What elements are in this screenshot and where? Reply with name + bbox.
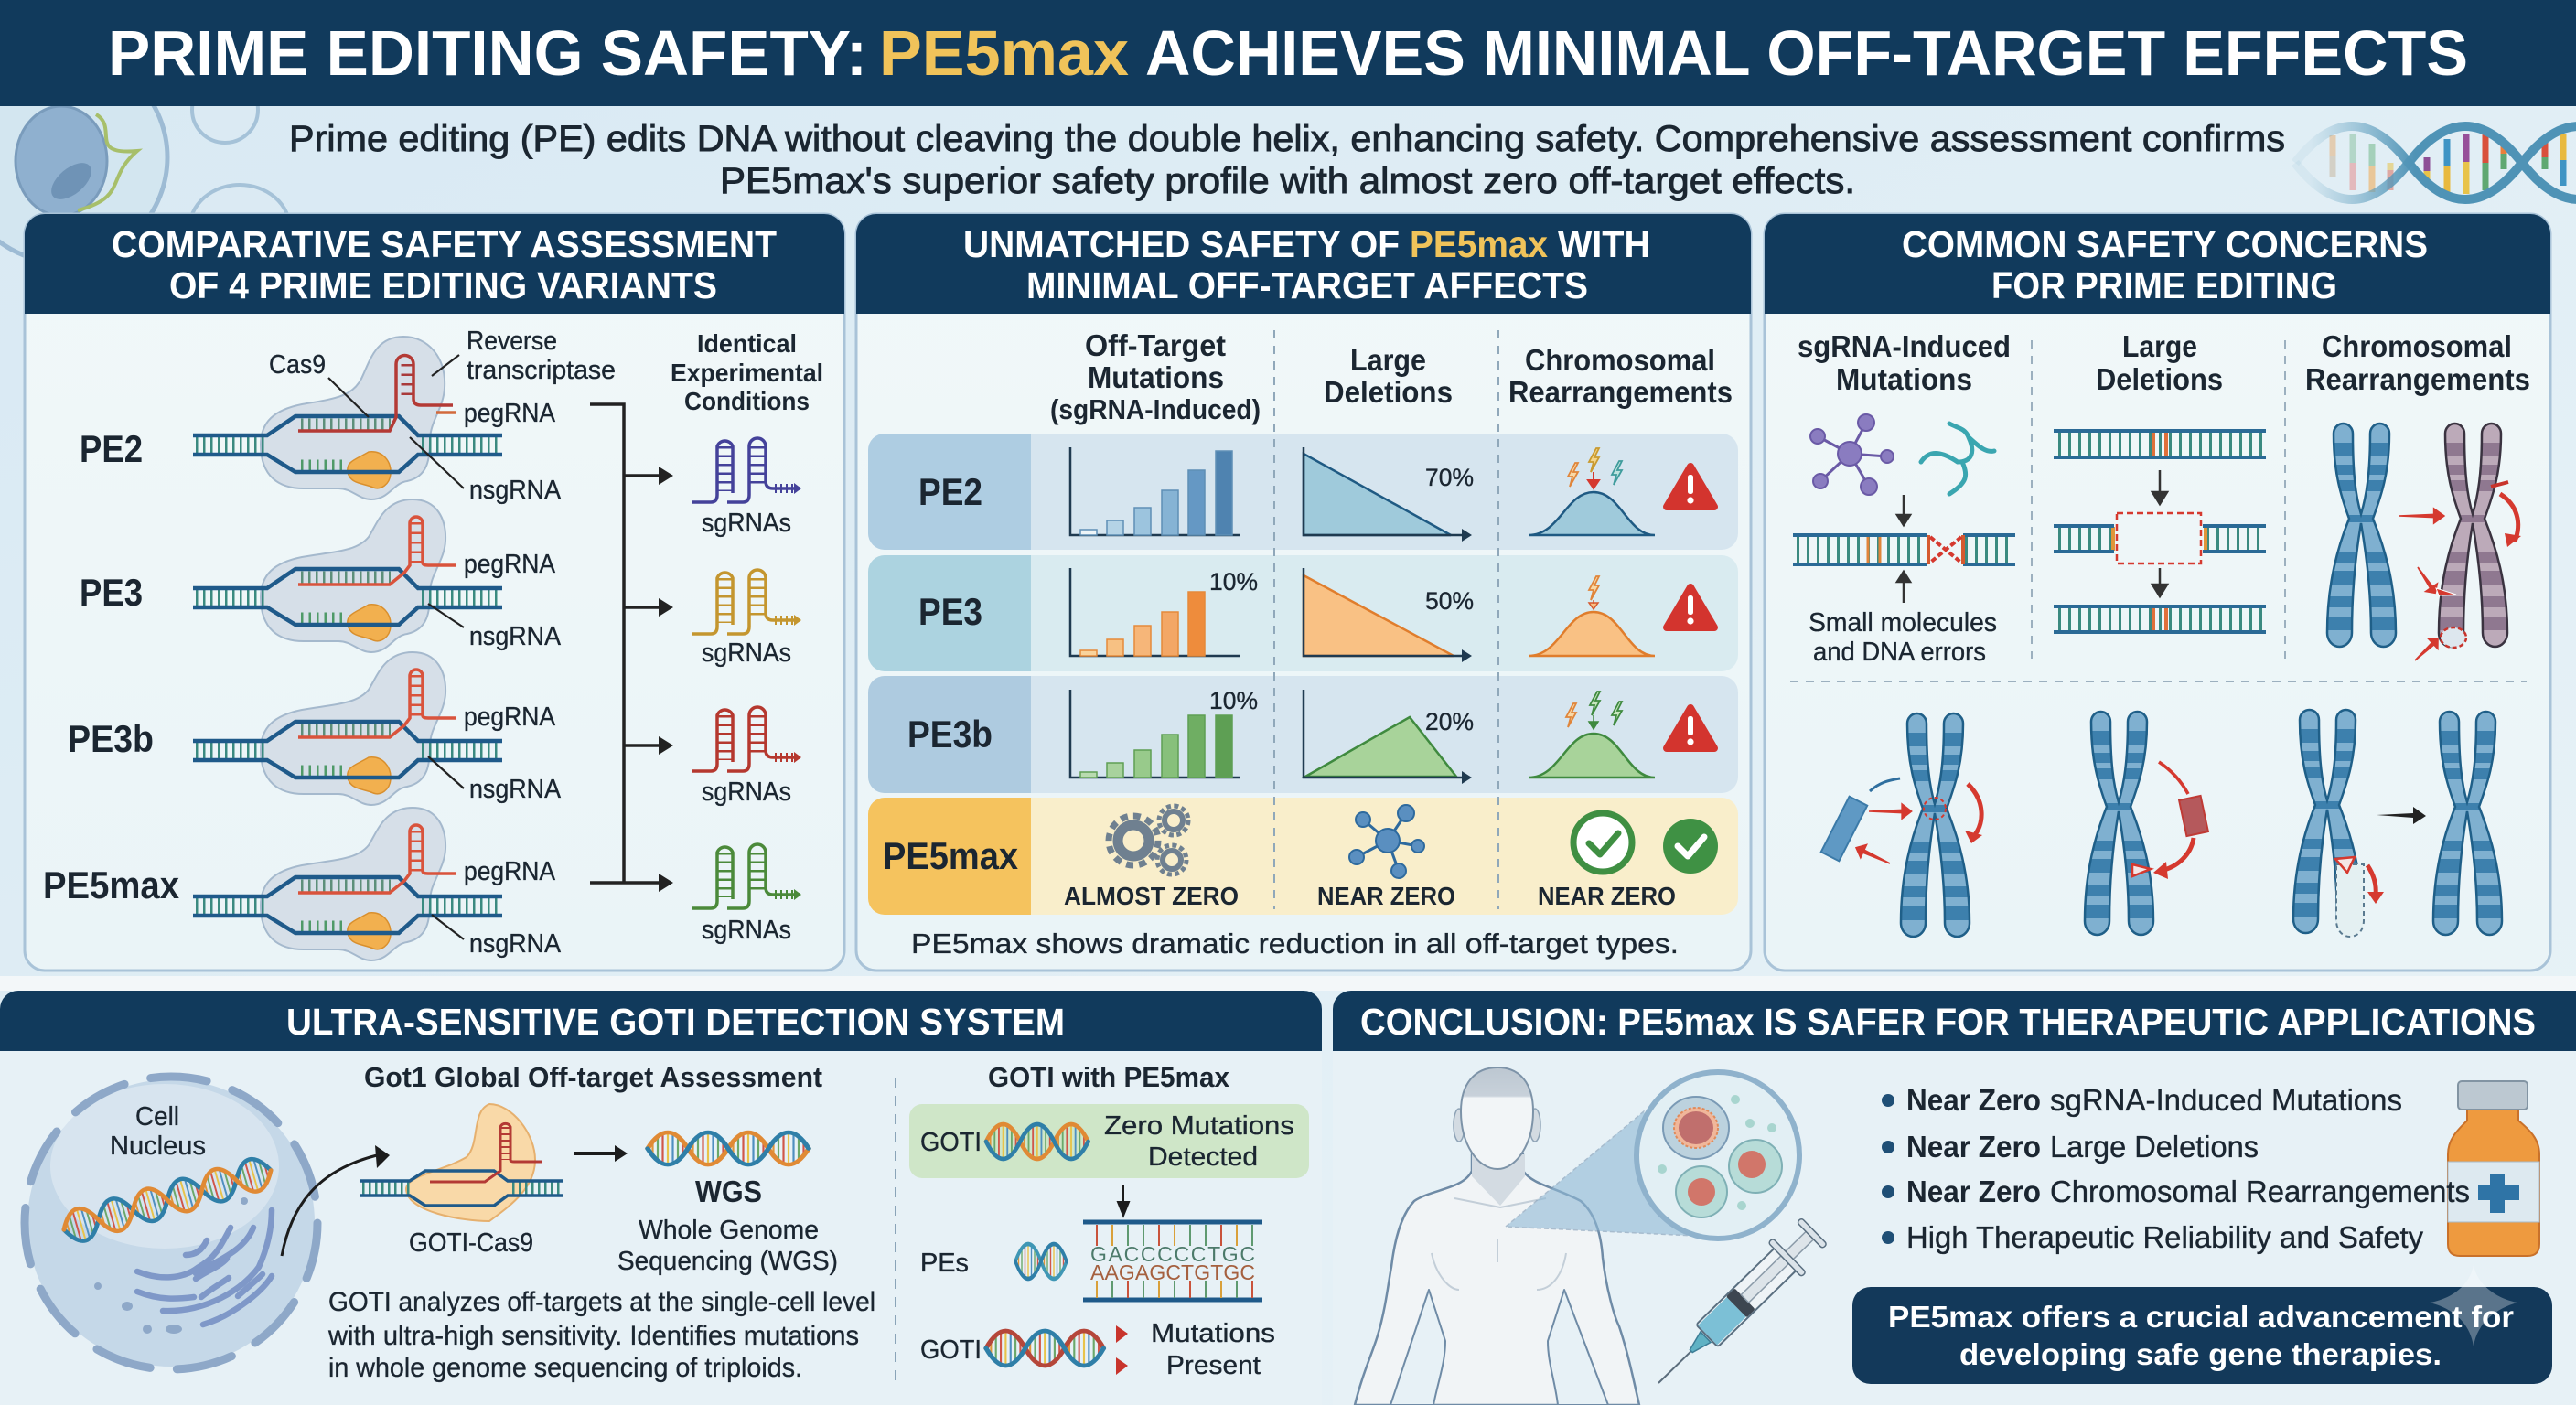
sequencing readout: GACCCCCTGC [1090,1242,1255,1266]
diagram labels: pegRNA [464,702,556,732]
sgRNA labels: sgRNAs [702,778,791,807]
deletion chart: PE3: 50% [1425,587,1474,615]
caption: PE5max shows dramatic reduction in all off-target types. [911,928,1679,960]
heading: WITH [1558,223,1650,265]
icon: green checks [1573,813,1718,874]
icon: gears [1109,806,1188,874]
sequencing readout [1083,1222,1262,1300]
row: PE3 [868,555,1738,671]
diagram labels: pegRNA [464,399,556,428]
result: mutations present: Present [1166,1351,1261,1380]
row: PE3: PE3 [918,590,982,633]
panel: GOTI detection system [0,991,1322,1405]
rearrangement chart: PE3b [1529,692,1714,778]
row: PE2: PE2 [918,470,982,513]
column headings: Rearrangements [1508,375,1733,409]
chromosome: insertion [2082,712,2208,935]
bullet list [1882,1083,2470,1254]
column headings: Mutations [1088,360,1224,394]
sgRNA labels [702,509,791,945]
variant labels: PE3 [80,571,143,614]
sgRNA labels: sgRNAs [702,638,791,668]
diagram labels: nsgRNA [469,929,562,959]
panel: comparative safety assessment [25,214,844,971]
bar chart: PE3: 10% [1209,568,1258,595]
bullet list: Near Zero [1906,1130,2041,1164]
GOTI description [327,1287,875,1383]
diagram labels [269,327,616,959]
title banner [0,0,2576,106]
diagram labels: nsgRNA [469,775,562,804]
nucleus label [110,1102,206,1161]
WGS labels: Whole Genome [639,1216,819,1245]
chromosome: deletion [2291,710,2384,937]
PEs row: PEs [920,1249,969,1278]
column headings: Rearrangements [2305,362,2530,396]
nucleus label: Cell [135,1102,179,1132]
arrows to DNA [1897,495,1910,603]
result: zero mutations: GOTI [920,1128,982,1157]
column headings: Large [2122,329,2197,363]
result: zero mutations: Detected [1148,1142,1258,1172]
chromosome: repaired [2431,712,2504,935]
title text: PRIME EDITING SAFETY: [108,17,867,89]
callout: PE5max offers a crucial advancement for [1888,1300,2514,1334]
cell illustration [25,1077,317,1369]
bullet list: sgRNA-Induced Mutations [2050,1083,2402,1117]
deletion chart: PE3 [1304,568,1474,662]
chromosome: normal [2324,424,2398,647]
PEs row [920,1244,1067,1279]
bullet list: Chromosomal Rearrangements [2050,1174,2470,1208]
column headings: (sgRNA-Induced) [1050,393,1261,425]
small molecules caption: and DNA errors [1813,638,1986,667]
column headings: Large [1350,343,1426,377]
rearrangement chart: PE3 [1529,576,1714,656]
subheading: GOTI with PE5max: GOTI with PE5max [988,1061,1230,1093]
diagram labels: pegRNA [464,550,556,579]
nucleus label: Nucleus [110,1132,206,1161]
conditions heading: Experimental [671,359,823,387]
rearrangement chart: PE2 [1529,448,1714,535]
sgRNA icons [692,438,801,908]
deletion chart: PE2 [1304,447,1474,542]
diagram labels: transcriptase [467,356,616,385]
diagram labels: nsgRNA [469,622,562,651]
callout [1852,1265,2552,1384]
deletion chart: PE3b: 20% [1425,708,1474,735]
bar chart: PE3b [1070,687,1258,778]
row: PE5max: PE5max [883,834,1019,877]
heading: FOR PRIME EDITING [1991,264,2337,306]
heading [1902,223,2428,306]
icon: small molecule [1810,414,1894,495]
variant labels: PE2 [80,427,143,470]
column headings: Off-Target [1085,328,1226,362]
WGS labels [617,1174,838,1276]
diagram: PE3 [193,499,502,652]
title text [108,17,2468,89]
diagram labels: pegRNA [464,857,556,886]
intro text: PE5max's superior safety profile with almost zero off-target effects. [720,161,1855,201]
heading: MINIMAL OFF-TARGET AFFECTS [1026,264,1588,306]
magnified cells [1637,1072,1799,1239]
WGS labels: WGS [695,1174,762,1208]
conditions heading: Identical [697,329,797,358]
strip between rows [0,976,2576,991]
column headings: Chromosomal [2322,329,2512,363]
column headings [1050,328,1733,425]
row: PE5max [868,798,1738,915]
row verdict labels: NEAR ZERO [1538,882,1676,910]
conditions heading: Conditions [684,387,810,415]
subheading: global assessment: Got1 Global Off-target Assessment [364,1061,822,1093]
arrow: repair [2377,807,2426,824]
title text: PE5max [879,17,1129,89]
row verdict labels [1064,882,1676,910]
diagram: PE5max [193,808,502,960]
helix: WGS [648,1132,809,1164]
conditions heading [671,329,823,415]
result: mutations present [920,1319,1275,1380]
column headings [1798,329,2530,396]
GOTI description: GOTI analyzes off-targets at the single-cell level [328,1287,875,1317]
diagram labels: Reverse [467,327,557,356]
chromosome: translocation [1821,713,1982,937]
diagram: PE2 [193,337,502,499]
callout: developing safe gene therapies. [1959,1337,2442,1371]
result: zero mutations [909,1104,1309,1178]
row: PE3b: PE3b [907,713,993,756]
icon: guide RNA strand [1921,424,1994,494]
small molecules caption: Small molecules [1809,608,1997,638]
heading: COMPARATIVE SAFETY ASSESSMENT [112,223,777,265]
column headings: Chromosomal [1525,343,1715,377]
DNA with break [1793,535,2015,564]
bullet list: Near Zero [1906,1083,2041,1117]
sgRNA labels: sgRNAs [702,916,791,945]
sgRNA labels: sgRNAs [702,509,791,538]
column headings: Deletions [1324,375,1453,409]
panel: conclusion [1333,991,2576,1405]
bullet list: Large Deletions [2050,1130,2259,1164]
arrow: to sequencing [1118,1185,1129,1216]
bullet list: Near Zero [1906,1174,2041,1208]
bar chart: PE2 [1070,447,1240,535]
row verdict labels: NEAR ZERO [1317,882,1455,910]
panel: common safety concerns [1765,214,2550,971]
small molecules caption [1809,608,1997,667]
bar chart: PE3b: 10% [1209,687,1258,714]
curved arrow to Cas9 [282,1155,377,1256]
GOTI description: in whole genome sequencing of triploids. [328,1353,802,1383]
heading: ULTRA-SENSITIVE GOTI DETECTION SYSTEM [286,1001,1065,1043]
diagram labels: nsgRNA [469,476,562,505]
deletion chart: PE3b [1304,690,1474,784]
bullet list: High Therapeutic Reliability and Safety [1906,1220,2423,1254]
chromosome: rearranged [2436,424,2509,647]
column headings: Mutations [1836,362,1972,396]
row verdict labels: ALMOST ZERO [1064,882,1239,910]
medicine vial [2448,1081,2539,1256]
row: PE2 [868,434,1738,550]
Cas9 label: GOTI-Cas9 [409,1228,533,1258]
title text: ACHIEVES MINIMAL OFF-TARGET EFFECTS [1145,17,2468,89]
top-right DNA helix [2295,126,2576,199]
variant labels: PE5max [43,863,180,906]
result: mutations present: GOTI [920,1335,982,1365]
connector arrows [590,404,673,892]
icon: molecule [1349,805,1424,878]
variant labels: PE3b [68,717,154,760]
top-left cell illustration [0,52,290,273]
variant labels [43,427,180,906]
row: PE3b [868,676,1738,793]
heading [112,223,777,306]
heading: UNMATCHED SAFETY OF [963,223,1400,265]
arrow to WGS [574,1145,628,1162]
intro text [289,119,2285,201]
heading: OF 4 PRIME EDITING VARIANTS [169,264,717,306]
red arrows: rearrangement [2399,482,2521,667]
syringe [1642,1214,1830,1400]
heading: PE5max [1410,223,1548,265]
column headings: Deletions [2096,362,2223,396]
organelle: golgi [137,1210,272,1325]
diagram labels: Cas9 [269,350,326,380]
GOTI-Cas9 diagram [360,1104,563,1221]
human silhouette [1355,1067,1639,1405]
magnification cone [1506,1111,1695,1236]
bar chart: PE3 [1070,568,1258,656]
GOTI description: with ultra-high sensitivity. Identifies mutations [327,1321,859,1351]
deletion chart: PE2: 70% [1425,464,1474,491]
sequencing readout: AAGAGCTGTGC [1090,1260,1255,1284]
diagram: PE3b [193,652,502,805]
large deletion diagram [2054,431,2266,632]
panel: unmatched safety of PE5max [856,214,1751,971]
helix in nucleus [59,1154,275,1246]
WGS labels: Sequencing (WGS) [617,1247,838,1276]
result: zero mutations: Zero Mutations [1104,1111,1294,1141]
heading [963,223,1650,306]
result: mutations present: Mutations [1151,1319,1275,1348]
column headings: sgRNA-Induced [1798,329,2011,363]
intro text: Prime editing (PE) edits DNA without cleaving the double helix, enhancing safety. Comprehensive assessment confirms [289,119,2285,159]
heading: COMMON SAFETY CONCERNS [1902,223,2428,265]
